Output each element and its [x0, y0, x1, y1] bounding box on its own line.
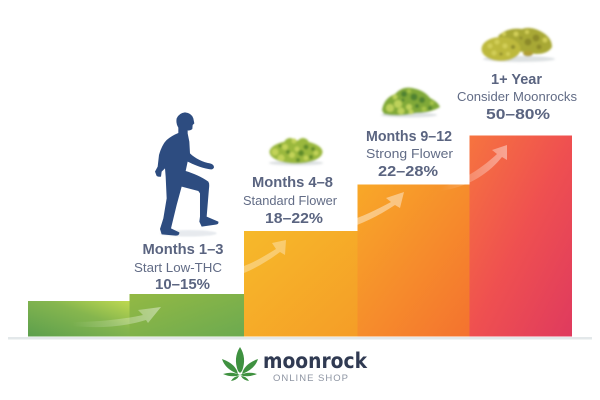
icon: cannabis leaf [222, 347, 258, 381]
label: months 1-3: Start Low-THC [134, 261, 222, 275]
label: 1+ year: 1+ Year [491, 72, 542, 88]
stair chart [28, 136, 572, 336]
label: 1+ year: Consider Moonrocks [457, 90, 577, 104]
icon: person climbing stairs [155, 112, 218, 237]
step 1 bar [28, 301, 130, 336]
label: months 4-8 [243, 175, 337, 227]
step 4 bar [358, 184, 470, 336]
icon: flower bud small [269, 138, 323, 166]
arrow: step 4 to 5 [440, 145, 507, 191]
label: 1+ year: 50–80% [486, 106, 550, 123]
label: months 1-3: 10–15% [155, 276, 210, 293]
step 2 bar [130, 294, 244, 336]
step 5 bar [470, 136, 572, 336]
label: months 4-8: 18–22% [265, 210, 323, 227]
wordmark: moonrock [263, 349, 368, 373]
icon: moonrock [482, 28, 555, 62]
label: months 4-8: Months 4–8 [252, 175, 333, 191]
label: months 9-12: Strong Flower [366, 147, 453, 161]
arrow: step 1 to 2 [72, 307, 161, 327]
label: months 1-3 [134, 242, 224, 293]
label: months 4-8: Standard Flower [243, 194, 337, 208]
arrow: step 2 to 3 [244, 240, 286, 273]
arrow: step 3 to 4 [357, 192, 404, 225]
label: 1+ year [457, 72, 577, 123]
label: months 9-12 [366, 129, 453, 180]
ground line [8, 337, 592, 340]
label: months 9-12: Months 9–12 [366, 129, 452, 145]
label: months 9-12: 22–28% [378, 163, 438, 180]
logo [222, 347, 368, 384]
icon: flower bud medium [381, 88, 440, 118]
tagline: ONLINE SHOP [273, 373, 348, 384]
label: months 1-3: Months 1–3 [142, 242, 224, 258]
step 3 bar [244, 231, 358, 336]
